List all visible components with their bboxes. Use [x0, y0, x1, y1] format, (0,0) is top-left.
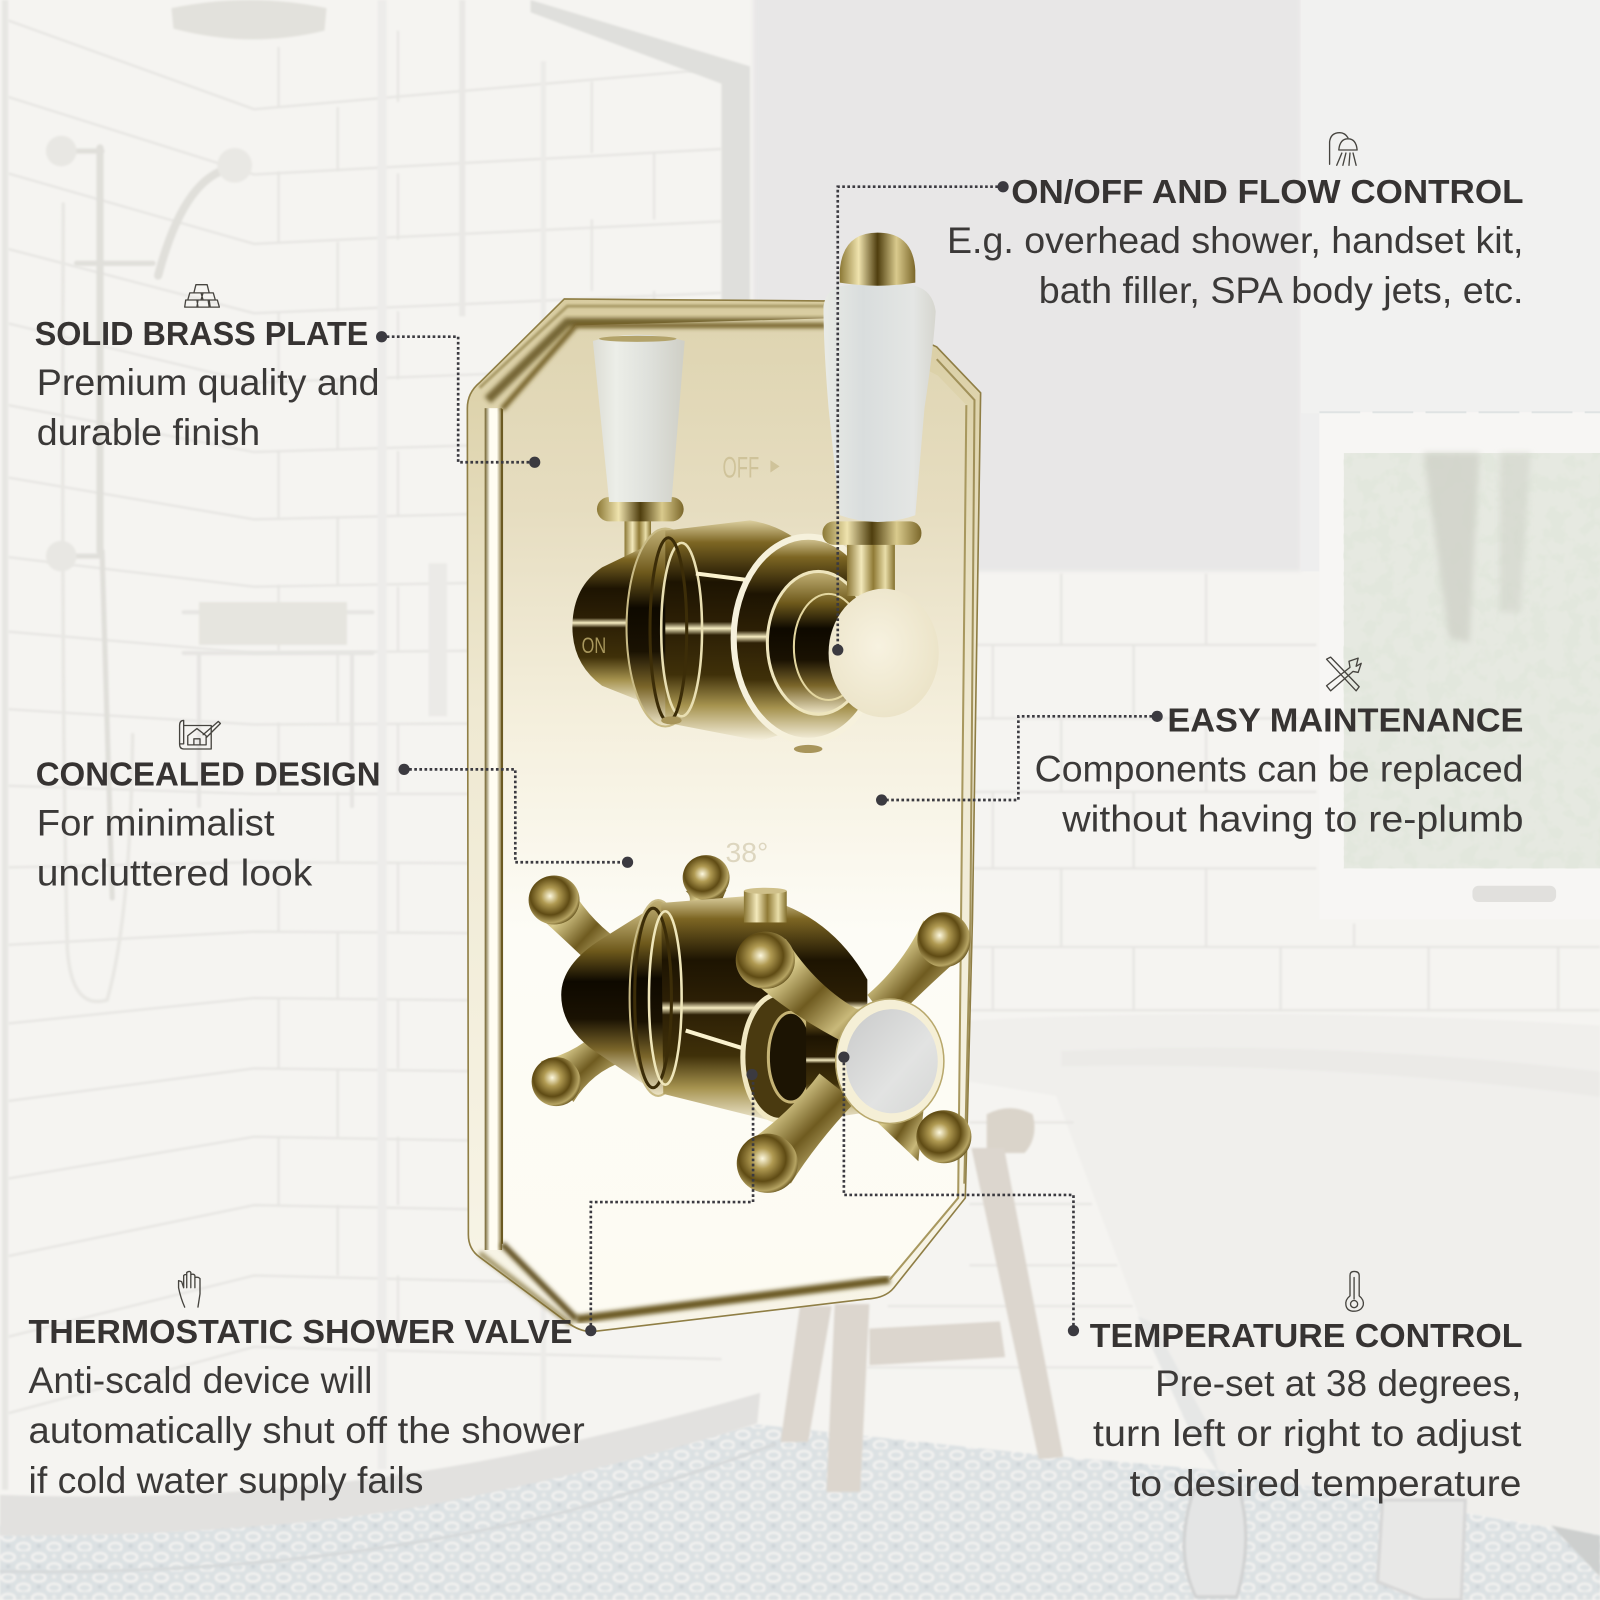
bevel shading: [480, 306, 974, 1324]
icon: shower head: [1330, 133, 1357, 165]
panel: on/off and flow control: [947, 133, 1523, 311]
hub collar: [743, 994, 888, 1120]
bath claw feet: [1184, 1490, 1600, 1600]
engraved marks: [722, 452, 780, 868]
backplate outer rim: [467, 299, 981, 1332]
shower tray: [0, 1393, 760, 1536]
leader: thermostatic valve: [585, 1069, 758, 1336]
rear cylinder: [572, 543, 653, 706]
description: turn left or right to adjust: [1093, 1413, 1521, 1454]
panel: easy maintenance: [1035, 657, 1523, 840]
flange and main body: [582, 520, 847, 741]
leader: concealed design: [398, 764, 633, 868]
front cross knobs: [736, 912, 971, 1193]
icon: gold bars: [185, 285, 219, 307]
product: shower valve plate: [467, 233, 981, 1332]
inner plate face: [502, 318, 966, 1319]
description: [947, 220, 1523, 311]
ceramic cap: [836, 999, 944, 1123]
icon: hand: [179, 1271, 200, 1307]
heading: THERMOSTATIC SHOWER VALVE: [29, 1314, 572, 1351]
engraved marks: 38°: [726, 837, 768, 868]
description: Components can be replaced: [1035, 749, 1523, 790]
leader: on/off and flow control: [832, 181, 1009, 656]
panel: thermostatic shower valve: [29, 1271, 585, 1501]
description: [37, 803, 313, 894]
upper diverter valve: [572, 233, 939, 753]
wall tiles right: [969, 573, 1600, 1010]
lower temperature valve: [529, 855, 971, 1193]
temperature stop pin: [744, 888, 787, 922]
lower tiles behind stool: [867, 1122, 1153, 1367]
description: bath filler, SPA body jets, etc.: [1039, 270, 1523, 311]
panel: temperature control: [1090, 1271, 1522, 1504]
shower enclosure tiles: [8, 20, 721, 1413]
lever brass cap: [840, 233, 915, 286]
description: without having to re-plumb: [1061, 799, 1523, 840]
rear lever stem and collar: [597, 497, 684, 561]
flange and body: [630, 896, 867, 1124]
panel: concealed design: [36, 720, 381, 894]
icon: spanner and screwdriver: [1327, 657, 1361, 691]
wooden stool: [781, 1108, 1063, 1492]
heading: EASY MAINTENANCE: [1167, 703, 1523, 740]
rear ceramic lever: [593, 335, 685, 502]
icon: thermometer: [1346, 1271, 1363, 1311]
leader: solid brass plate: [376, 331, 540, 468]
heading: TEMPERATURE CONTROL: [1090, 1318, 1522, 1355]
shower fittings: [46, 0, 447, 1001]
description: For minimalist: [37, 803, 274, 844]
rear cross knobs: [529, 855, 730, 1106]
leader: temperature control: [838, 1052, 1079, 1336]
heading: ON/OFF AND FLOW CONTROL: [1011, 174, 1523, 211]
description: durable finish: [37, 412, 260, 453]
icon: house plan and pencil: [180, 720, 220, 749]
description: Pre-set at 38 degrees,: [1155, 1363, 1521, 1404]
description: [29, 1360, 585, 1501]
inner plate dark edge: [502, 326, 966, 1319]
description: if cold water supply fails: [29, 1460, 423, 1501]
front bulb: [734, 537, 883, 741]
heading: CONCEALED DESIGN: [36, 757, 381, 794]
description: uncluttered look: [37, 853, 313, 894]
description: [37, 362, 380, 453]
front cross arms: [747, 920, 964, 1184]
bathtub: [969, 1014, 1600, 1536]
glass enclosure frame: [2, 0, 750, 1490]
description: Anti-scald device will: [29, 1360, 372, 1401]
lever stem: [847, 543, 895, 596]
rear cylinder: [561, 913, 643, 1084]
description: [1035, 749, 1523, 840]
leader: easy maintenance: [876, 711, 1163, 806]
front lever collar: [822, 521, 921, 545]
leader lines and dots: [376, 181, 1163, 1336]
back wall: [753, 0, 1600, 571]
knob disc: [829, 589, 939, 717]
engraved marks: OFF: [722, 452, 759, 485]
rear cross handle: [539, 886, 727, 1102]
mounting screws: [661, 716, 822, 753]
floor: [0, 1424, 1600, 1600]
heading: SOLID BRASS PLATE: [35, 316, 368, 353]
description: E.g. overhead shower, handset kit,: [947, 220, 1523, 261]
description: Premium quality and: [37, 362, 380, 403]
window with garden view: [1319, 412, 1600, 919]
flange and main body: ON: [582, 633, 606, 658]
description: automatically shut off the shower: [29, 1410, 585, 1451]
front ceramic lever: [823, 283, 936, 522]
description: [1093, 1363, 1521, 1504]
description: to desired temperature: [1130, 1463, 1521, 1504]
panel: solid brass plate: [35, 285, 380, 453]
